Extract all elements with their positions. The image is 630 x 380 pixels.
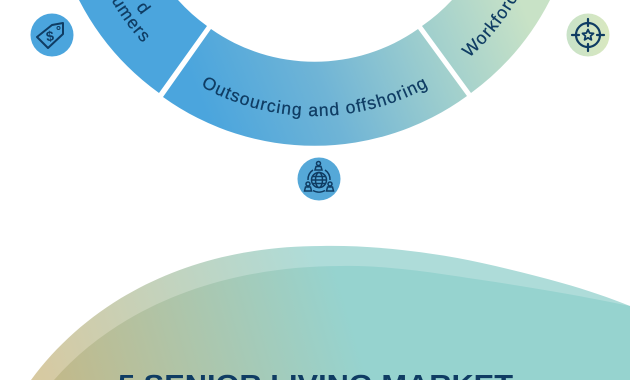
icon: price tag: $ bbox=[45, 28, 55, 44]
icon: target with star bbox=[566, 14, 610, 56]
panel: bottom blob background bbox=[31, 246, 630, 380]
panel: bottom ring segment bbox=[163, 29, 467, 146]
panel: left ring segment bbox=[79, 0, 207, 93]
label: Outsourcing and offshoring: Outsourcing and offshoring bbox=[203, 78, 428, 119]
inner blob layer bbox=[54, 266, 630, 380]
icon: globe with people bbox=[298, 158, 340, 200]
icon: price tag bbox=[30, 14, 74, 56]
panel: right ring segment bbox=[422, 0, 550, 93]
